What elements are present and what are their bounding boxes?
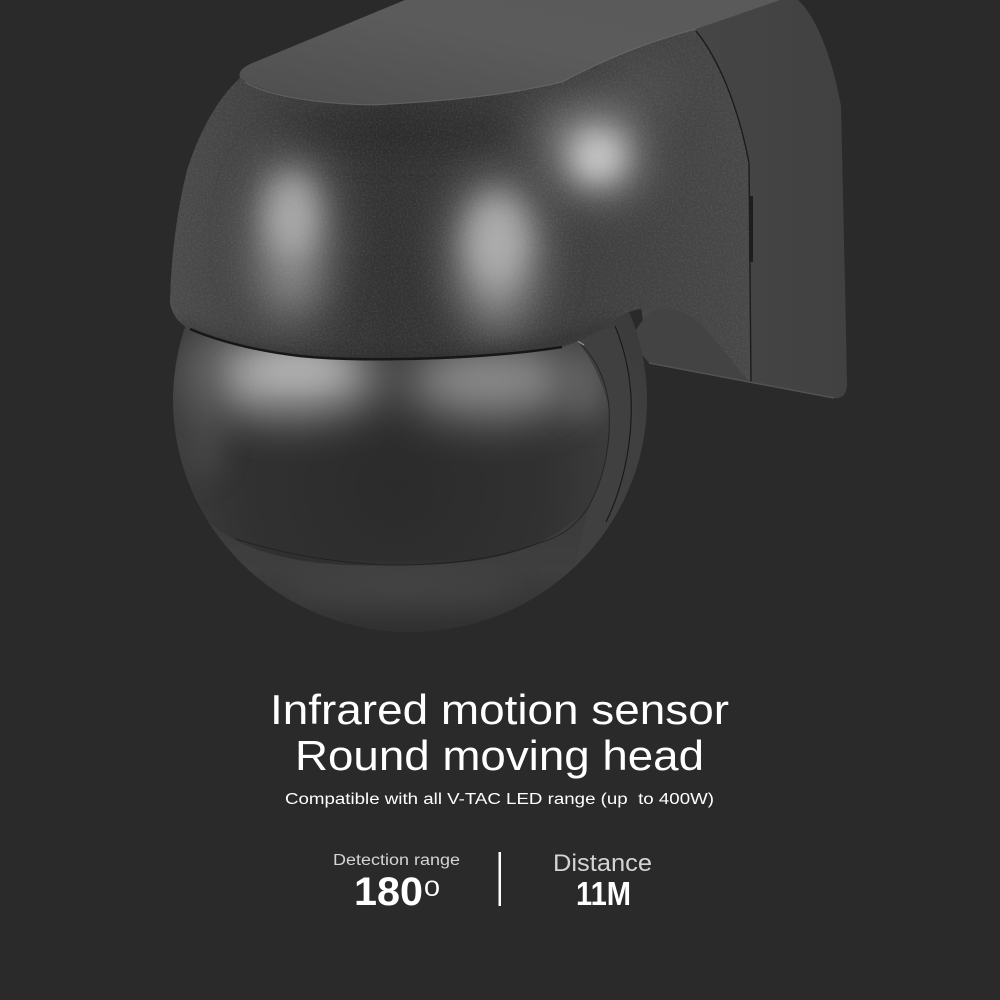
stat: distance: Distance xyxy=(553,850,652,877)
plate lower rim xyxy=(649,363,834,398)
stat: detection range: 180 xyxy=(354,870,423,914)
plate recess xyxy=(630,308,749,381)
wall plate xyxy=(640,0,847,398)
housing shading xyxy=(308,126,352,144)
stat: distance xyxy=(553,850,652,912)
top flat surface xyxy=(239,0,780,105)
divider xyxy=(498,852,501,906)
housing shadow line xyxy=(190,329,562,359)
lens highlights xyxy=(200,337,380,413)
stat: detection range: Detection range xyxy=(333,852,460,869)
housing grain texture xyxy=(160,20,760,390)
side notch xyxy=(749,196,753,262)
housing top rim highlight xyxy=(245,29,696,105)
ball lens xyxy=(173,312,647,622)
lens seams xyxy=(236,339,609,565)
stat: detection range xyxy=(333,852,460,914)
seam line xyxy=(696,31,751,382)
stat: detection range: 0 xyxy=(424,876,440,901)
product photo: motion sensor xyxy=(160,0,847,640)
stat: distance: 11M xyxy=(576,875,631,912)
title xyxy=(270,686,729,779)
housing bottom shadow xyxy=(185,324,604,357)
title: Round moving head xyxy=(295,732,704,779)
housing highlights xyxy=(260,60,680,330)
title: Infrared motion sensor xyxy=(270,686,729,733)
infographic canvas xyxy=(170,0,847,906)
lens side strip xyxy=(580,342,614,401)
upper housing xyxy=(160,20,760,390)
subtitle: Compatible with all V-TAC LED range (up to 400W) xyxy=(285,791,714,808)
lens lower ring xyxy=(230,533,562,590)
